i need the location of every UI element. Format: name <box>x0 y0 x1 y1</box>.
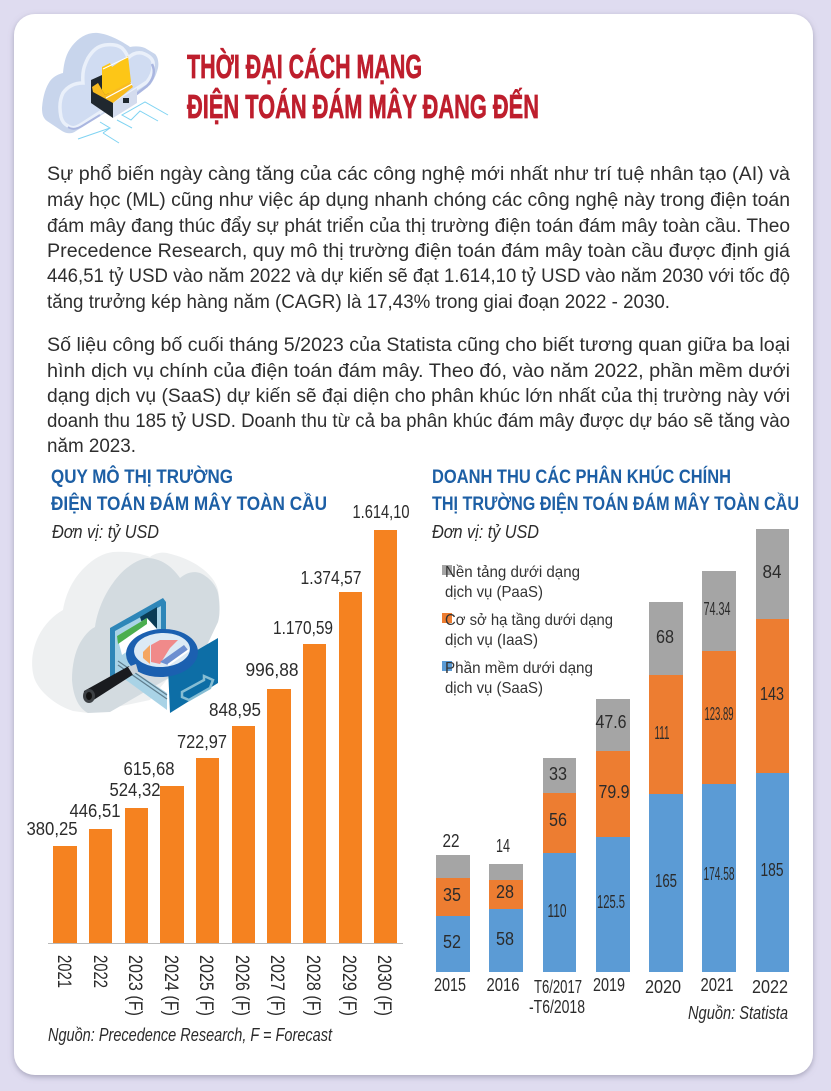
text block: intro paragraph 1 <box>47 164 790 313</box>
icon: cloud with file drawer and magnifier <box>32 552 220 713</box>
text block: intro paragraph 1: máy học (ML) cũng như việc áp dụng nhanh chóng các công nghệ này trong điện toán <box>47 190 790 211</box>
bar 2020 <box>649 602 683 972</box>
category labels: 2020 <box>645 977 681 997</box>
value labels: 1.374,57 <box>300 568 362 588</box>
value labels: 1.614,10 <box>352 502 410 522</box>
data labels: 33 <box>549 764 567 784</box>
data labels: 74.34 <box>704 599 730 619</box>
bar T6/2017 <box>543 758 576 972</box>
data labels: 56 <box>549 810 567 830</box>
data labels: 68 <box>656 627 674 647</box>
category labels: 2021 <box>700 975 734 995</box>
text block: intro paragraph 1: đám mây đang thúc đẩy sự phát triển của thị trường điện toán đám mây toàn cầu. Theo <box>47 216 790 237</box>
year labels: 2029 (F) <box>338 955 359 1016</box>
legend: segments: dịch vụ (SaaS) <box>445 680 543 697</box>
category labels: 2015 <box>434 975 466 995</box>
data labels: 110 <box>548 901 566 921</box>
year labels: 2028 (F) <box>302 955 323 1016</box>
unit label: left chart: Đơn vị: tỷ USD <box>52 522 159 542</box>
bar 2022 <box>756 529 789 972</box>
title: ĐIỆN TOÁN ĐÁM MÂY ĐANG ĐẾN <box>187 88 539 125</box>
value labels: 722,97 <box>177 732 227 752</box>
year labels: 2021 <box>53 955 74 988</box>
source: left chart: Nguồn: Precedence Research, F = Forecast <box>48 1025 333 1045</box>
data labels: 14 <box>496 836 510 856</box>
source: right chart: Nguồn: Statista <box>688 1003 788 1023</box>
bar 2015 <box>436 855 470 972</box>
text block: intro paragraph 2: năm 2023. <box>47 436 136 457</box>
bar 2021 <box>702 571 736 972</box>
value labels: 524,32 <box>110 780 160 800</box>
category labels: 2016 <box>486 975 520 995</box>
data labels: 111 <box>654 723 670 743</box>
value labels: 1.170,59 <box>273 618 333 638</box>
data labels: 125.5 <box>597 892 625 912</box>
text block: intro paragraph 1: 446,51 tỷ USD vào năm 2022 và dự kiến sẽ đạt 1.614,10 tỷ USD vào năm 2030 với tốc độ <box>47 266 790 287</box>
text block: intro paragraph 2: hình dịch vụ chính của điện toán đám mây. Theo đó, vào năm 2022, phần mềm dưới <box>47 361 790 382</box>
text block: intro paragraph 2: Số liệu công bố cuối tháng 5/2023 của Statista cũng cho biết tương quan giữa ba loại <box>47 335 790 356</box>
year labels: 2025 (F) <box>195 955 216 1016</box>
legend: segments: Cơ sở hạ tầng dưới dạng <box>445 612 613 629</box>
text block: intro paragraph 2: doanh thu 185 tỷ USD. Doanh thu từ cả ba phân khúc đám mây được dự báo sẽ tăng vào <box>47 411 790 432</box>
text block: intro paragraph 1: tăng trưởng kép hàng năm (CAGR) là 17,43% trong giai đoạn 2022 - 2030. <box>47 292 670 313</box>
title: THỜI ĐẠI CÁCH MẠNG <box>187 48 422 85</box>
text block: intro paragraph 1: Precedence Research, quy mô thị trường điện toán đám mây toàn cầu được định giá <box>47 241 790 262</box>
bar chart: market size <box>26 502 410 1016</box>
heading: segment revenue chart: DOANH THU CÁC PHÂN KHÚC CHÍNH <box>432 466 731 488</box>
data labels: 79.9 <box>598 782 630 802</box>
value labels: 996,88 <box>246 660 298 680</box>
category labels: T6/2017 <box>534 977 582 997</box>
bar 2019 <box>596 699 630 972</box>
year labels <box>53 955 394 1016</box>
data labels: 123.89 <box>704 704 734 724</box>
heading: market size chart <box>51 466 327 515</box>
unit label: right chart: Đơn vị: tỷ USD <box>432 522 539 542</box>
legend: segments <box>442 564 613 697</box>
data labels: 58 <box>496 929 514 949</box>
value labels: 446,51 <box>70 801 120 821</box>
year labels: 2027 (F) <box>266 955 287 1016</box>
heading: market size chart: ĐIỆN TOÁN ĐÁM MÂY TOÀN CẦU <box>51 493 327 515</box>
axis line <box>48 943 403 944</box>
category labels <box>434 975 788 1017</box>
year labels: 2023 (F) <box>124 955 145 1016</box>
bars <box>53 530 397 943</box>
heading: segment revenue chart <box>432 466 799 515</box>
title <box>187 48 539 125</box>
text block: intro paragraph 1: Sự phổ biến ngày càng tăng của các công nghệ mới nhất như trí tuệ nhân tạo (AI) và <box>47 164 790 185</box>
legend: segments: dịch vụ (IaaS) <box>445 632 538 649</box>
data labels <box>442 562 784 952</box>
bar 2016 <box>489 864 523 972</box>
stacked bar chart: segment revenue <box>434 529 789 1017</box>
category labels: 2022 <box>752 977 788 997</box>
value labels <box>26 502 410 839</box>
year labels: 2024 (F) <box>160 955 181 1016</box>
legend: segments: dịch vụ (PaaS) <box>445 584 543 601</box>
legend: segments: Phần mềm dưới dạng <box>445 660 593 677</box>
value labels: 848,95 <box>209 700 261 720</box>
data labels: 174.58 <box>704 864 734 884</box>
text block: intro paragraph 2: dạng dịch vụ (SaaS) dự kiến sẽ đại diện cho phân khúc lớn nhất của thị trường này với <box>47 386 790 407</box>
legend: segments: Nền tảng dưới dạng <box>445 564 580 581</box>
data labels: 28 <box>496 882 514 902</box>
data labels: 35 <box>443 885 461 905</box>
category labels: 2019 <box>593 975 625 995</box>
year labels: 2026 (F) <box>231 955 252 1016</box>
data labels: 165 <box>655 871 677 891</box>
year labels: 2030 (F) <box>373 955 394 1016</box>
value labels: 615,68 <box>124 759 174 779</box>
data labels: 84 <box>762 562 782 582</box>
data labels: 47.6 <box>596 712 626 732</box>
icon: cloud with folder drawer <box>42 33 168 143</box>
data labels: 52 <box>443 932 461 952</box>
year labels: 2022 <box>89 955 110 988</box>
data labels: 185 <box>760 860 784 880</box>
category labels: -T6/2018 <box>529 997 585 1017</box>
data labels: 143 <box>760 684 784 704</box>
data labels: 22 <box>442 831 460 851</box>
heading: market size chart: QUY MÔ THỊ TRƯỜNG <box>51 466 233 488</box>
value labels: 380,25 <box>26 819 78 839</box>
text block: intro paragraph 2 <box>47 335 790 457</box>
